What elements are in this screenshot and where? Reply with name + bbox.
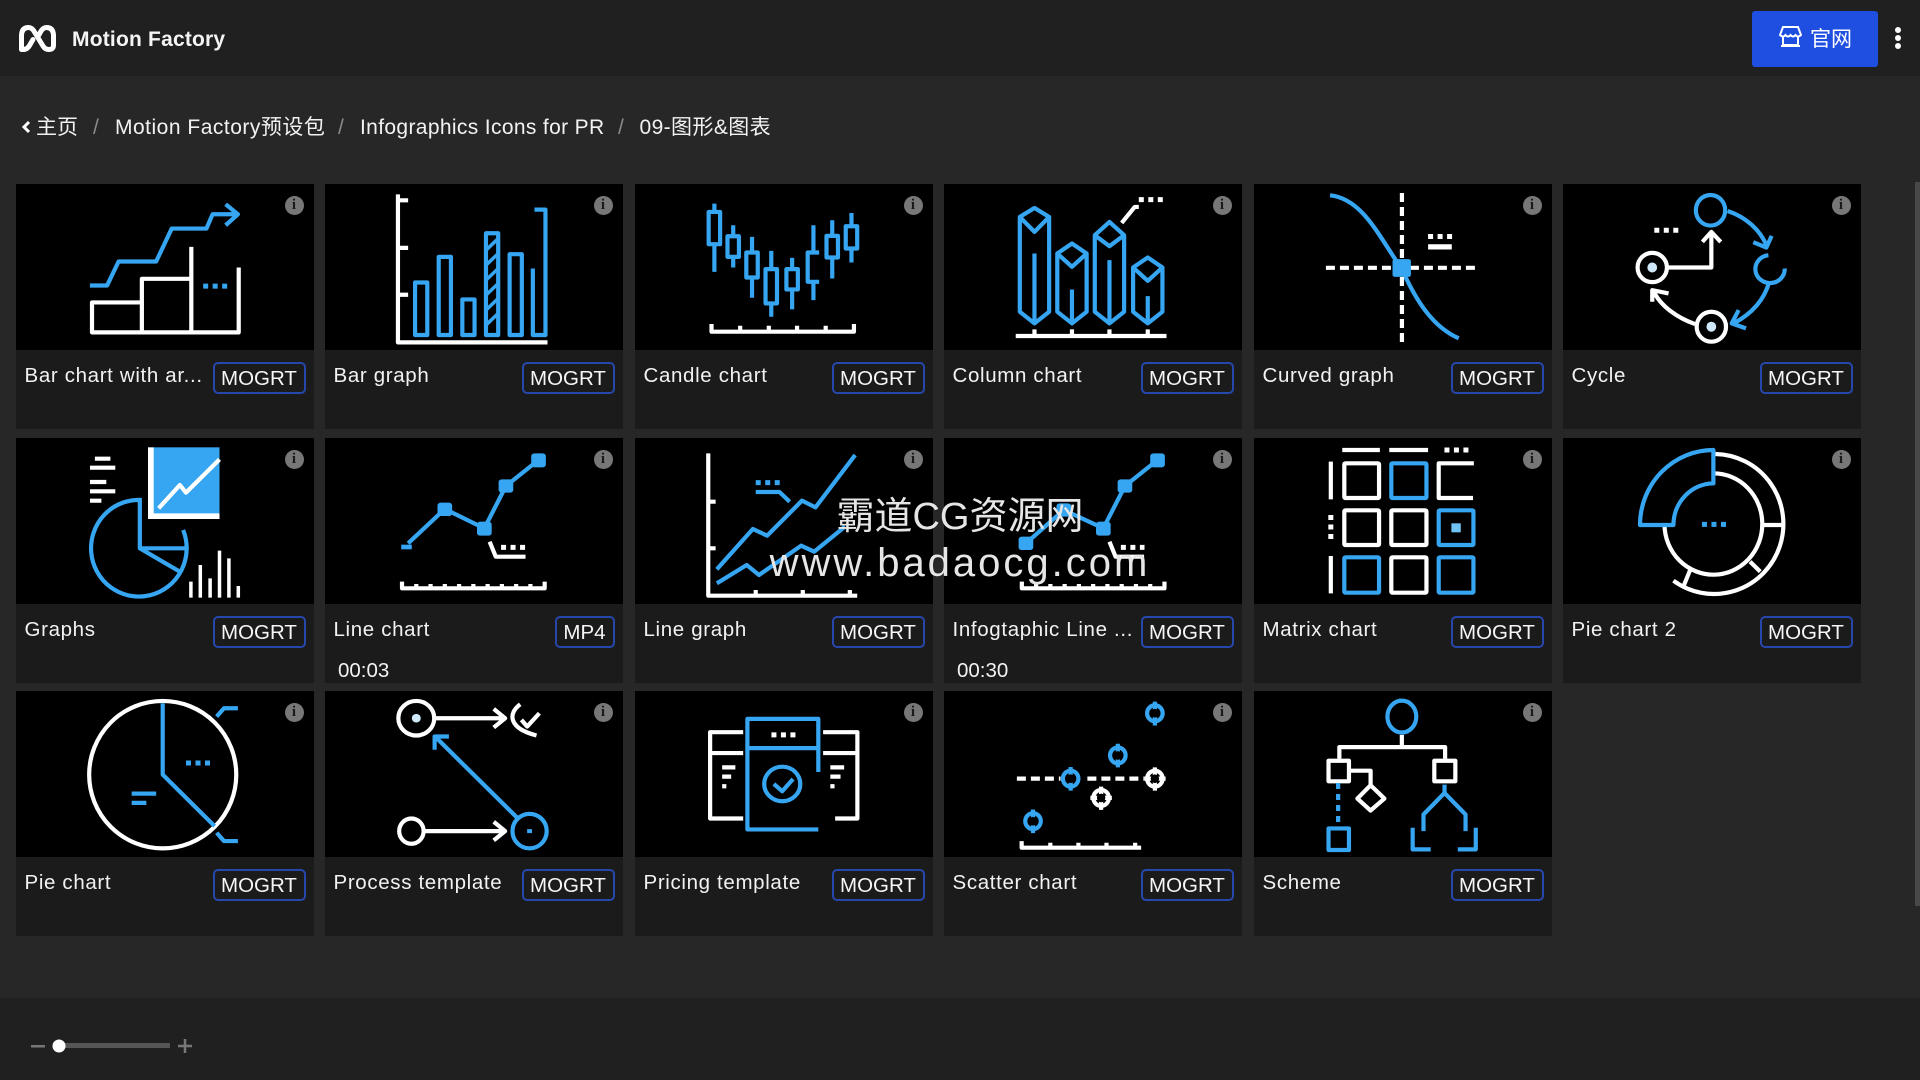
- format badge: [1140, 616, 1234, 648]
- zoom slider: [31, 1039, 192, 1053]
- format badge: [554, 616, 614, 648]
- brand name: Motion Factory: [72, 28, 225, 51]
- info icon: i: [601, 704, 605, 720]
- format badge: MP4: [563, 621, 606, 644]
- info icon: [1522, 702, 1542, 722]
- icon: more menu: [1895, 27, 1901, 49]
- info icon: [1522, 196, 1542, 214]
- crumb: current: 09-图形&图表: [640, 116, 771, 139]
- icon: pricing template: [635, 691, 932, 857]
- watermark line 2: www.badaocg.com: [770, 541, 1150, 585]
- info icon: [1832, 450, 1850, 468]
- label: Bar chart with ar...: [24, 364, 203, 387]
- info icon: i: [1220, 450, 1224, 466]
- icon: pie chart: [16, 691, 314, 857]
- format badge: MOGRT: [840, 367, 916, 390]
- format badge: MOGRT: [221, 874, 297, 897]
- icon: matrix chart: [1254, 438, 1552, 604]
- card: cycle: [1563, 184, 1860, 429]
- card: scheme: [1254, 691, 1552, 936]
- format badge: [1140, 362, 1234, 394]
- card: matrix chart: [1254, 438, 1552, 683]
- info icon: [594, 702, 612, 722]
- format badge: [522, 869, 614, 901]
- card: column chart: [944, 184, 1242, 429]
- info icon: i: [911, 450, 915, 466]
- label: Graphs: [24, 618, 96, 641]
- icon: pie chart 2: [1563, 438, 1860, 604]
- label: Cycle: [1572, 364, 1626, 387]
- label: Candle chart: [644, 364, 768, 387]
- format badge: MOGRT: [530, 367, 606, 390]
- crumb: infographics icons: Infographics Icons for PR: [360, 116, 605, 139]
- info icon: [594, 450, 612, 468]
- card: curved graph: [1254, 184, 1552, 429]
- label: Column chart: [952, 364, 1082, 387]
- info icon: i: [1839, 450, 1843, 466]
- watermark line 1: 霸道CG资源网: [836, 496, 1084, 538]
- format badge: MOGRT: [221, 367, 297, 390]
- card: bar chart with arrow: [16, 184, 314, 429]
- icon: scatter chart: [944, 691, 1242, 857]
- info icon: i: [911, 704, 915, 720]
- info icon: [1832, 196, 1850, 214]
- card: graphs: [16, 438, 314, 683]
- duration: 00:03: [338, 659, 389, 682]
- label: Matrix chart: [1262, 618, 1377, 641]
- info icon: [284, 702, 304, 722]
- info icon: i: [1530, 450, 1534, 466]
- label: Pricing template: [644, 871, 801, 894]
- crumb: home: 主页: [36, 116, 78, 139]
- format badge: [1140, 869, 1234, 901]
- info icon: [1212, 450, 1232, 468]
- label: Process template: [334, 871, 502, 894]
- info icon: i: [292, 196, 296, 212]
- card: bar graph: [325, 184, 622, 429]
- info icon: [1212, 196, 1232, 214]
- format badge: MOGRT: [1459, 367, 1535, 390]
- format badge: MOGRT: [530, 874, 606, 897]
- breadcrumb: /: [338, 116, 344, 139]
- format badge: MOGRT: [1768, 367, 1844, 390]
- label: Line chart: [334, 618, 430, 641]
- card: line graph: [635, 438, 932, 683]
- format badge: [1450, 616, 1544, 648]
- card: line chart: [325, 438, 622, 683]
- icon: line chart: [325, 438, 622, 604]
- format badge: [522, 362, 614, 394]
- info icon: i: [601, 196, 605, 212]
- scrollbar: [1915, 182, 1920, 906]
- info icon: i: [1839, 196, 1843, 212]
- label: Scheme: [1262, 871, 1342, 894]
- card: candle chart: [635, 184, 932, 429]
- format badge: MOGRT: [1149, 367, 1225, 390]
- card: infographic line chart: [944, 438, 1242, 683]
- icon: cycle: [1563, 184, 1860, 350]
- format badge: [212, 362, 306, 394]
- icon: bar graph: [325, 184, 622, 350]
- card: process template: [325, 691, 622, 936]
- label: Scatter chart: [952, 871, 1077, 894]
- info icon: [284, 196, 304, 214]
- icon: curved graph: [1254, 184, 1552, 350]
- format badge: [1760, 616, 1852, 648]
- icon: process template: [325, 691, 622, 857]
- info icon: i: [1220, 196, 1224, 212]
- info icon: [904, 702, 922, 722]
- icon: back chevron: [22, 121, 30, 133]
- logo: [19, 25, 56, 52]
- format badge: MOGRT: [221, 621, 297, 644]
- icon: candle chart: [635, 184, 932, 350]
- info icon: [284, 450, 304, 468]
- format badge: MOGRT: [1459, 874, 1535, 897]
- format badge: [832, 362, 924, 394]
- label: Infogtaphic Line ...: [952, 618, 1133, 641]
- info icon: [904, 196, 922, 214]
- card: scatter chart: [944, 691, 1242, 936]
- label: Line graph: [644, 618, 747, 641]
- crumb: motion factory: Motion Factory预设包: [115, 116, 325, 139]
- format badge: [1450, 362, 1544, 394]
- card: pie chart 2: [1563, 438, 1860, 683]
- format badge: [1760, 362, 1852, 394]
- format badge: [212, 869, 306, 901]
- icon: graphs: [16, 438, 314, 604]
- footer bar with zoom slider: [0, 998, 1920, 1080]
- button: official site: [1752, 11, 1878, 67]
- format badge: MOGRT: [1149, 874, 1225, 897]
- info icon: i: [1530, 196, 1534, 212]
- label: Curved graph: [1262, 364, 1395, 387]
- header bar: [0, 0, 1920, 76]
- info icon: i: [292, 704, 296, 720]
- icon: line graph: [635, 438, 932, 604]
- info icon: i: [601, 450, 605, 466]
- format badge: MOGRT: [840, 874, 916, 897]
- info icon: [1212, 702, 1232, 722]
- format badge: MOGRT: [840, 621, 916, 644]
- icon: column chart: [944, 184, 1242, 350]
- icon: infographic line chart: [944, 438, 1242, 604]
- icon: scheme: [1254, 691, 1552, 857]
- format badge: [212, 616, 306, 648]
- info icon: i: [292, 450, 296, 466]
- crumb separators: /: [93, 116, 99, 139]
- format badge: [832, 616, 924, 648]
- info icon: i: [911, 196, 915, 212]
- info icon: [904, 450, 922, 468]
- duration: 00:30: [957, 659, 1008, 682]
- button: official site: 官网: [1810, 28, 1852, 51]
- format badge: MOGRT: [1149, 621, 1225, 644]
- format badge: MOGRT: [1768, 621, 1844, 644]
- format badge: MOGRT: [1459, 621, 1535, 644]
- icon: store: [1779, 26, 1802, 47]
- breadcrumb: /: [618, 116, 624, 139]
- icon: bar chart with arrow: [16, 184, 314, 350]
- label: Bar graph: [334, 364, 429, 387]
- info icon: [594, 196, 612, 214]
- card: pie chart: [16, 691, 314, 936]
- format badge: [832, 869, 924, 901]
- breadcrumb: [22, 116, 771, 139]
- info icon: i: [1530, 704, 1534, 720]
- card: pricing template: [635, 691, 932, 936]
- info icon: [1522, 450, 1542, 468]
- label: Pie chart 2: [1572, 618, 1677, 641]
- label: Pie chart: [24, 871, 111, 894]
- info icon: i: [1220, 704, 1224, 720]
- format badge: [1450, 869, 1544, 901]
